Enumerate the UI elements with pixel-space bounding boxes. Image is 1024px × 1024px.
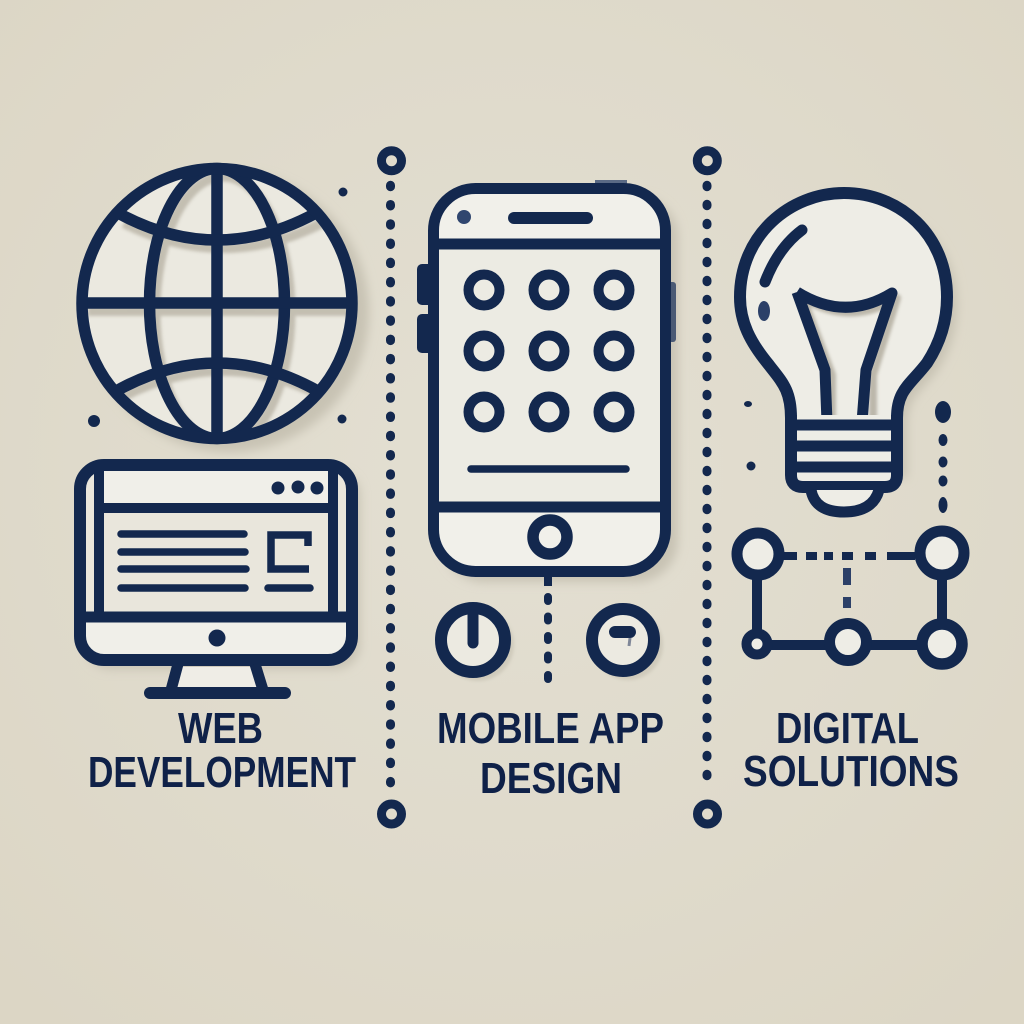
decorative dot: lower left of globe: [88, 415, 100, 427]
connector: dotted phone line: [544, 577, 552, 680]
panel: digital solutions: [737, 193, 964, 796]
divider: left dotted line: [382, 151, 402, 824]
icon: light bulb: [740, 193, 957, 512]
heading: digital solutions: DIGITAL: [776, 704, 919, 753]
icon: node network: [737, 531, 964, 664]
heading: web development: [88, 704, 356, 797]
connector: dotted bulb line: [935, 401, 951, 513]
heading: mobile app design: MOBILE APP: [437, 704, 664, 753]
icon: left dial: [441, 608, 514, 681]
decorative dot: upper right of globe: [338, 188, 348, 196]
decorative dot: left of bulb: [744, 401, 752, 407]
decorative dot: lower left of bulb: [746, 462, 756, 470]
heading: mobile app design: DESIGN: [480, 754, 622, 803]
heading: digital solutions: SOLUTIONS: [743, 747, 959, 796]
panel: mobile app design: [417, 180, 678, 803]
divider: right dotted line: [697, 151, 718, 824]
icon: right dial: [592, 609, 663, 680]
decorative dot: lower right of globe: [338, 414, 346, 424]
heading: web development: WEB: [178, 704, 263, 753]
heading: mobile app design: [437, 704, 664, 803]
icon: globe: [82, 168, 369, 452]
panel: web development: [78, 168, 369, 797]
icon: desktop monitor: [78, 465, 360, 693]
heading: digital solutions: [743, 704, 959, 796]
icon: smartphone: [417, 180, 678, 582]
heading: web development: DEVELOPMENT: [88, 748, 356, 797]
